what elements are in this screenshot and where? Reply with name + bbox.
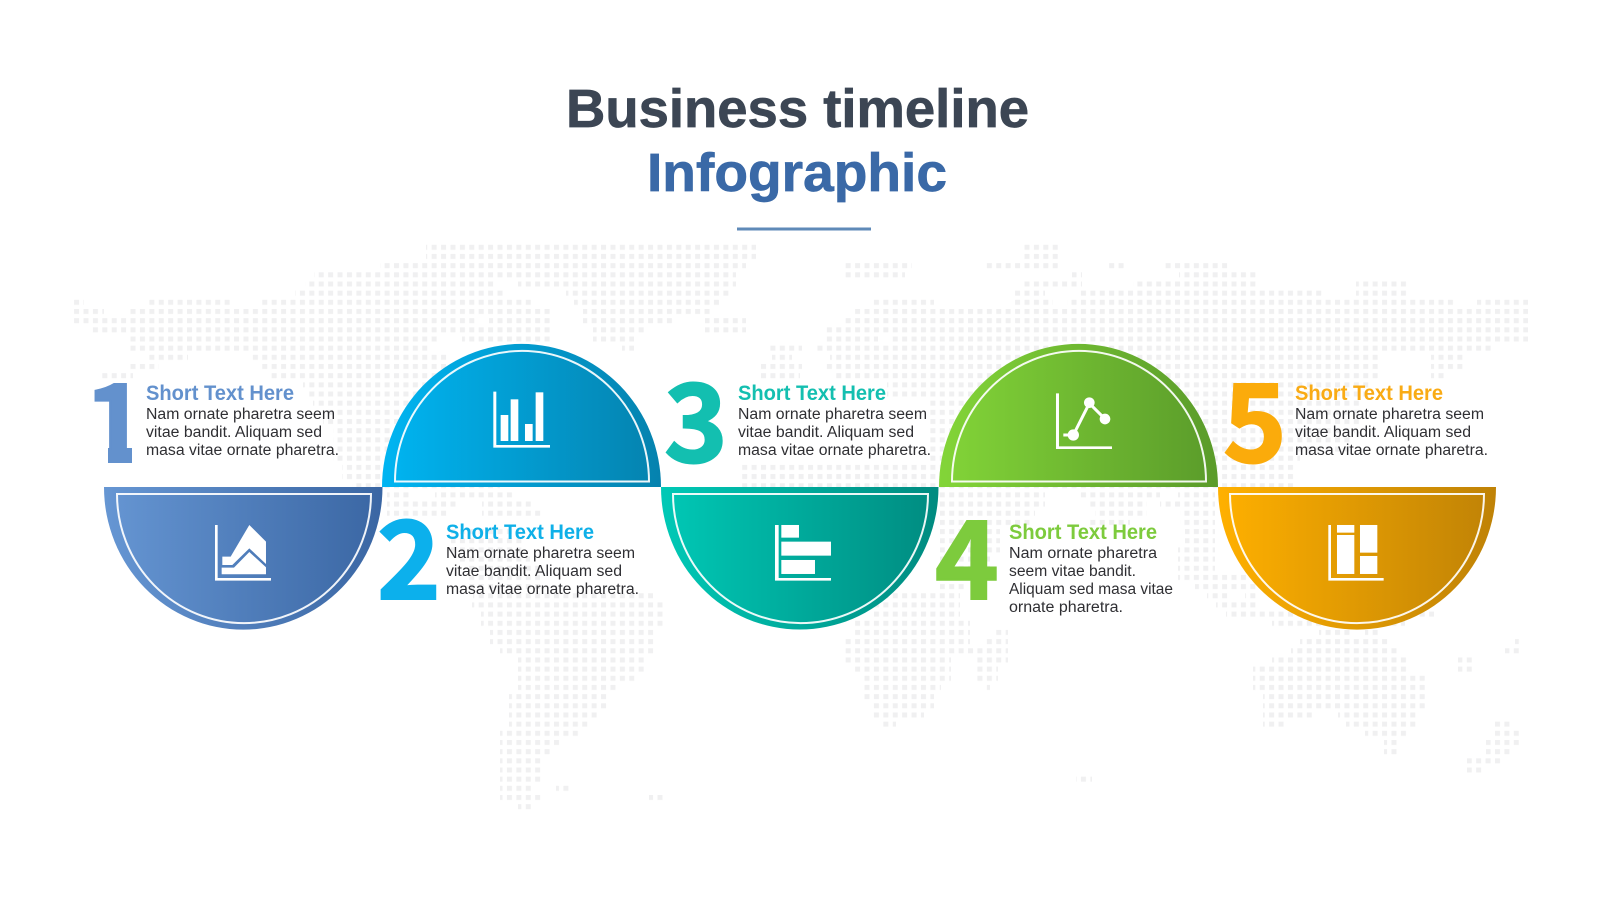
- text block 1: [146, 382, 339, 459]
- dotted world map: [74, 248, 1528, 807]
- text block 3: vitae bandit. Aliquam sed: [738, 424, 914, 441]
- inner outline 2: [395, 351, 649, 482]
- icon: area chart: [215, 525, 271, 581]
- text block 1: vitae bandit. Aliquam sed: [146, 424, 322, 441]
- text block 4: ornate pharetra.: [1009, 599, 1123, 616]
- text block 1: masa vitae ornate pharetra.: [146, 442, 339, 459]
- text block 5: Nam ornate pharetra seem: [1295, 406, 1484, 423]
- text block 3: masa vitae ornate pharetra.: [738, 442, 931, 459]
- text block 2: vitae bandit. Aliquam sed: [446, 563, 622, 580]
- inner outline 3: [673, 494, 928, 623]
- text block 4: Short Text Here: [1009, 521, 1157, 544]
- text block 2: Nam ornate pharetra seem: [446, 545, 635, 562]
- icon: bar chart: [493, 392, 550, 448]
- text block 3: Nam ornate pharetra seem: [738, 406, 927, 423]
- text block 5: masa vitae ornate pharetra.: [1295, 442, 1488, 459]
- inner outline 1: [117, 494, 371, 623]
- text block 2: [446, 521, 639, 598]
- infographic canvas: [74, 88, 1528, 809]
- title: Infographic: [647, 144, 947, 203]
- icon: block chart: [1328, 525, 1384, 581]
- number 4: 4: [935, 475, 999, 631]
- text block 3: [738, 382, 931, 459]
- half circle 1: [104, 487, 382, 630]
- text block 5: Short Text Here: [1295, 382, 1443, 405]
- text block 2: masa vitae ornate pharetra.: [446, 581, 639, 598]
- text block 5: [1295, 382, 1488, 459]
- icon: line chart: [1056, 393, 1112, 449]
- step 3: [661, 338, 938, 630]
- text block 4: Nam ornate pharetra: [1009, 545, 1158, 562]
- text block 4: [1009, 521, 1173, 616]
- text block 4: Aliquam sed masa vitae: [1009, 581, 1173, 598]
- number 5: 5: [1223, 338, 1287, 494]
- half circle 5: [1218, 487, 1496, 630]
- inner outline 4: [952, 351, 1206, 482]
- text block 1: Short Text Here: [146, 382, 294, 405]
- number 2: 2: [377, 475, 441, 631]
- inner outline 5: [1230, 494, 1484, 623]
- number 3: 3: [664, 338, 728, 494]
- text block 1: Nam ornate pharetra seem: [146, 406, 335, 423]
- title: Business timeline: [566, 80, 1029, 139]
- half circle 3: [661, 487, 938, 630]
- title: [566, 80, 1029, 203]
- half circle 4: [939, 344, 1218, 487]
- step 1: [94, 383, 382, 630]
- text block 3: Short Text Here: [738, 382, 886, 405]
- text block 4: seem vitae bandit.: [1009, 563, 1136, 580]
- text block 2: Short Text Here: [446, 521, 594, 544]
- step 4: [935, 344, 1218, 631]
- half circle 2: [382, 344, 661, 487]
- step 2: [377, 344, 661, 631]
- title underline: [737, 228, 871, 230]
- step 5: [1218, 338, 1496, 630]
- icon: horizontal bar chart: [775, 525, 831, 581]
- text block 5: vitae bandit. Aliquam sed: [1295, 424, 1471, 441]
- number 1: 1: [84, 338, 148, 494]
